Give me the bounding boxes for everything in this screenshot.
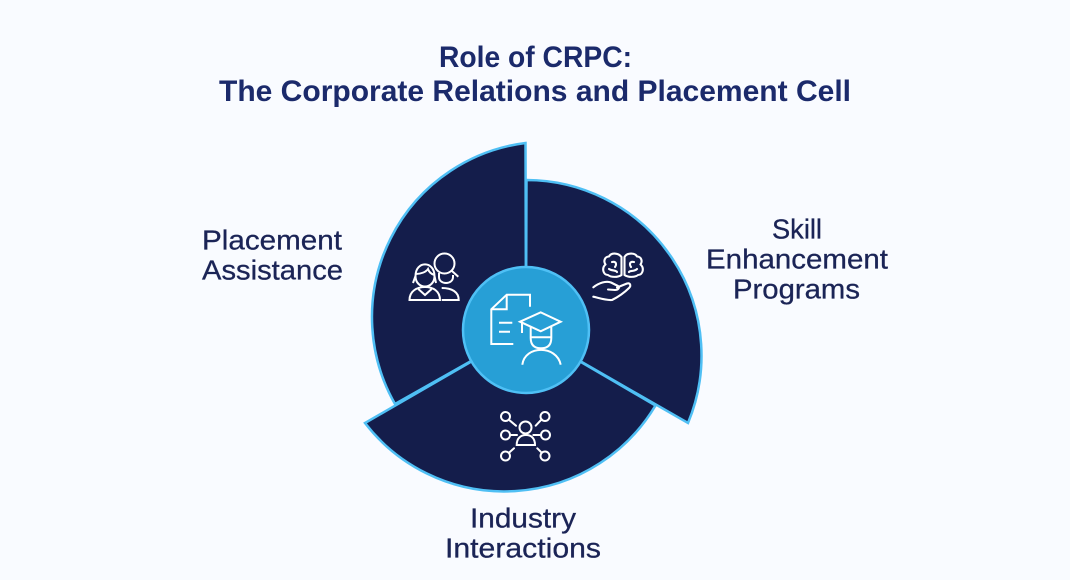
title: The Corporate Relations and Placement Cell <box>219 75 851 108</box>
center hub circle <box>463 267 589 393</box>
label: industry interactions <box>445 502 601 564</box>
label: placement assistance: Assistance <box>202 254 343 286</box>
icon: brain over hand <box>593 254 643 300</box>
icon: document and graduate <box>491 295 561 365</box>
label: skill enhancement programs: Programs <box>733 274 860 304</box>
title: Role of CRPC: <box>439 41 632 74</box>
panel: placement assistance segment <box>372 143 526 404</box>
label: industry interactions: Industry <box>470 502 576 534</box>
label: skill enhancement programs: Enhancement <box>706 244 888 274</box>
label: industry interactions: Interactions <box>445 532 601 564</box>
title <box>219 41 851 108</box>
icon: networked person <box>501 412 550 460</box>
panel: industry interactions segment <box>365 330 656 491</box>
panel: skill enhancement segment <box>526 180 702 423</box>
icon: people with magnifier <box>410 254 459 300</box>
label: placement assistance: Placement <box>202 224 342 256</box>
label: skill enhancement programs <box>706 214 888 304</box>
label: placement assistance <box>202 224 343 286</box>
label: skill enhancement programs: Skill <box>772 214 822 244</box>
